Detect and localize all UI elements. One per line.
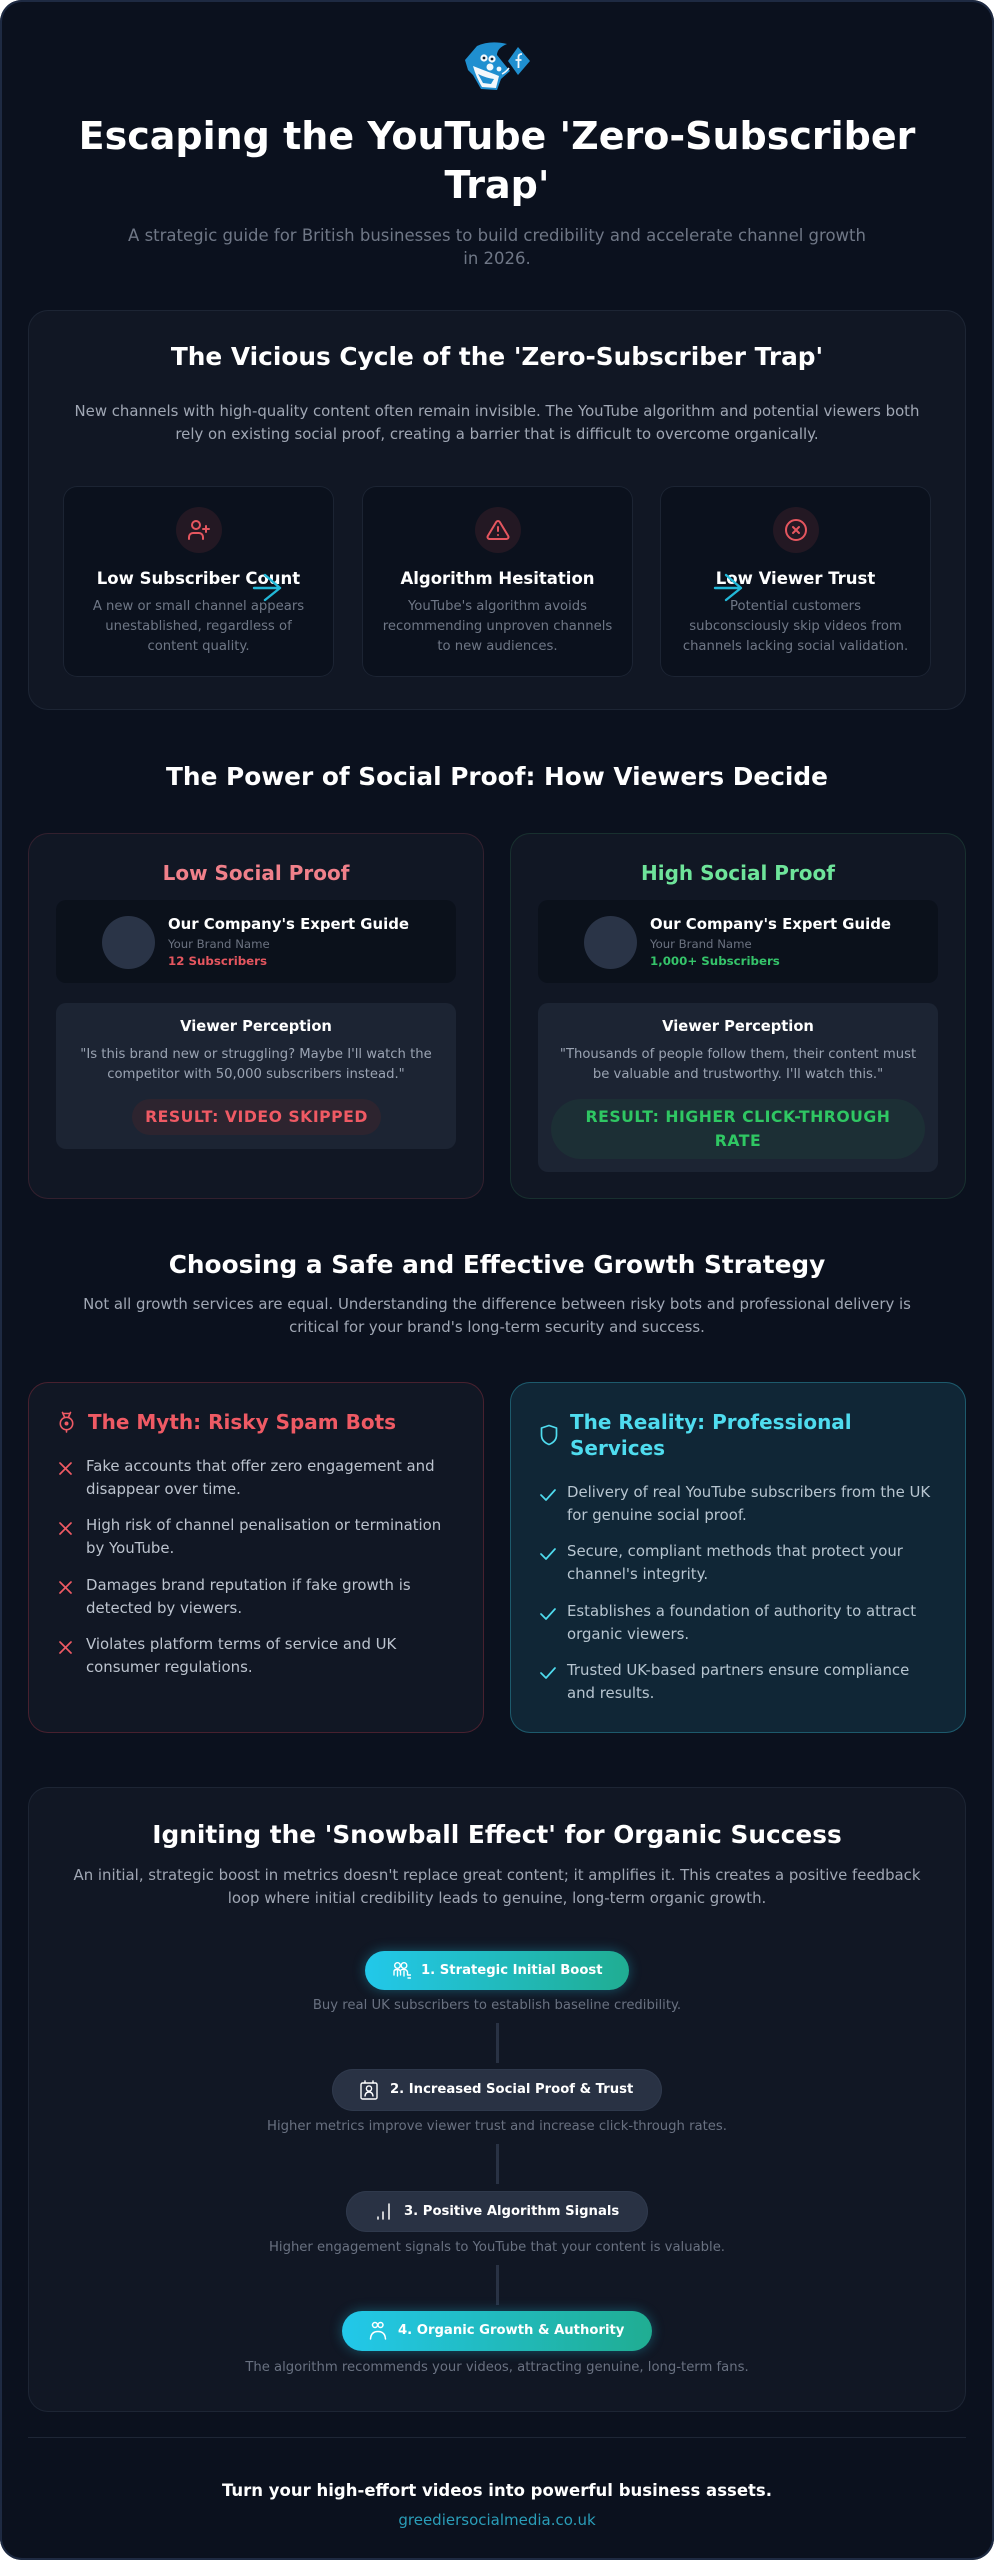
perception heading: Viewer Perception: [180, 1018, 332, 1035]
card: low viewer trust: [660, 486, 931, 677]
perception quote: [80, 1047, 432, 1082]
card title: Low Subscriber Count: [97, 569, 300, 588]
myth point 3: [86, 1576, 411, 1617]
title: Trap': [445, 163, 549, 207]
card text: [683, 599, 908, 654]
result badge: [132, 1099, 381, 1135]
intro text: growth strategy: Not all growth services are equal. Understanding the difference between risky bots and professional delivery is: [83, 1295, 911, 1313]
card: low subscriber count: [63, 486, 334, 677]
panel: vicious cycle: [28, 310, 966, 710]
myth point 4: consumer regulations.: [86, 1658, 253, 1676]
x icon: [59, 1522, 72, 1535]
subtitle: [128, 226, 866, 268]
viewer perception: high: [538, 1003, 938, 1172]
myth point 2: [86, 1516, 441, 1557]
step 4 label: 4. Organic Growth & Authority: [398, 2323, 624, 2338]
subtitle: in 2026.: [463, 249, 531, 268]
icon: user plus: [176, 507, 222, 553]
panel heading: low: Low Social Proof: [163, 861, 349, 885]
video title: Our Company's Expert Guide: [650, 915, 891, 933]
myth list: [59, 1456, 441, 1676]
x icon: [59, 1462, 72, 1475]
arrow: second to third card: [714, 574, 742, 602]
reality point 4: and results.: [567, 1684, 654, 1702]
subscriber count: 1,000+ Subscribers: [650, 954, 780, 968]
arrow: first to second card: [252, 574, 282, 602]
card title: Algorithm Hesitation: [400, 569, 595, 588]
check icon: [540, 1489, 556, 1501]
reality point 2: channel's integrity.: [567, 1565, 708, 1583]
check icon: [540, 1548, 556, 1560]
perception quote: "Thousands of people follow them, their content must: [560, 1047, 916, 1062]
perception quote: be valuable and trustworthy. I'll watch this.": [593, 1067, 883, 1082]
viewer perception: low: [56, 1003, 456, 1149]
step 1 label: 1. Strategic Initial Boost: [421, 1963, 603, 1978]
brand name: Your Brand Name: [650, 937, 752, 951]
step 1 description: Buy real UK subscribers to establish baseline credibility.: [313, 1998, 681, 2013]
myth point 3: Damages brand reputation if fake growth is: [86, 1576, 411, 1594]
card text: channels lacking social validation.: [683, 639, 908, 654]
myth point 2: by YouTube.: [86, 1539, 174, 1557]
myth heading: The Myth: Risky Spam Bots: [88, 1410, 396, 1434]
card text: [93, 599, 304, 654]
intro text: vicious cycle: [75, 402, 919, 443]
heading: snowball effect: Igniting the 'Snowball Effect' for Organic Success: [152, 1820, 842, 1849]
title: [79, 114, 916, 207]
video preview: low: [56, 900, 456, 983]
card text: subconsciously skip videos from: [689, 619, 902, 634]
subtitle: A strategic guide for British businesses to build credibility and accelerate channel growth: [128, 226, 866, 245]
card text: unestablished, regardless of: [105, 619, 292, 634]
intro text: vicious cycle: rely on existing social proof, creating a barrier that is difficult to overcome organically.: [175, 425, 819, 443]
heading: power of social proof: The Power of Social Proof: How Viewers Decide: [166, 762, 828, 791]
footer tagline: Turn your high-effort videos into powerful business assets.: [222, 2481, 772, 2500]
check icon: [540, 1667, 556, 1679]
step 3 description: Higher engagement signals to YouTube that your content is valuable.: [269, 2240, 725, 2255]
reality point 4: Trusted UK-based partners ensure compliance: [567, 1661, 909, 1679]
check icon: [540, 1608, 556, 1620]
step 2 label: 2. Increased Social Proof & Trust: [390, 2082, 633, 2097]
intro text: growth strategy: [83, 1295, 911, 1336]
myth point 1: [86, 1456, 435, 1498]
reality point 3: organic viewers.: [567, 1624, 689, 1642]
myth point 3: detected by viewers.: [86, 1599, 242, 1617]
card title: Low Viewer Trust: [716, 569, 875, 588]
myth point 1: Fake accounts that offer zero engagement and: [86, 1456, 435, 1474]
step 2 description: Higher metrics improve viewer trust and increase click-through rates.: [267, 2119, 727, 2134]
panel: the reality: [510, 1382, 966, 1733]
reality point 1: [567, 1482, 930, 1524]
card text: A new or small channel appears: [93, 599, 304, 614]
step 4 pill: [342, 2311, 652, 2351]
myth point 1: disappear over time.: [86, 1480, 241, 1498]
step 2 pill: [332, 2069, 662, 2111]
result badge: [551, 1099, 925, 1159]
icon: person with infinity: [370, 2322, 386, 2340]
myth point 4: Violates platform terms of service and UK: [86, 1635, 396, 1653]
icon: shield: [540, 1424, 558, 1446]
intro text: snowball effect: An initial, strategic boost in metrics doesn't replace great content; it amplifies it. This creates a positive feedback: [74, 1866, 920, 1884]
subscriber count: 12 Subscribers: [168, 954, 267, 968]
brand name: Your Brand Name: [168, 937, 270, 951]
channel avatar: [102, 916, 154, 968]
icon: warning triangle: [474, 507, 520, 553]
panel: the myth: [28, 1382, 484, 1733]
step 3 label: 3. Positive Algorithm Signals: [404, 2204, 619, 2219]
reality heading: [570, 1410, 852, 1460]
channel avatar: [584, 916, 636, 968]
perception quote: "Is this brand new or struggling? Maybe I'll watch the: [80, 1047, 432, 1062]
x icon: [59, 1641, 72, 1654]
card text: YouTube's algorithm avoids: [408, 599, 587, 614]
icon: contact card: [360, 2080, 378, 2100]
card text: to new audiences.: [437, 639, 558, 654]
card text: Potential customers: [730, 599, 861, 614]
panel: low social proof: [28, 833, 484, 1199]
myth point 2: High risk of channel penalisation or termination: [86, 1516, 441, 1534]
step 3 pill: [346, 2191, 648, 2232]
video preview: high: [538, 900, 938, 983]
reality heading: The Reality: Professional: [570, 1410, 852, 1434]
card: algorithm hesitation: [362, 486, 633, 677]
reality point 4: [566, 1661, 909, 1702]
logo: blue mascot with social badge: [465, 42, 530, 90]
perception quote: competitor with 50,000 subscribers instead.": [107, 1067, 405, 1082]
perception quote: [560, 1047, 916, 1082]
myth point 4: [86, 1635, 396, 1676]
result badge: RESULT: VIDEO SKIPPED: [145, 1107, 368, 1126]
x icon: [59, 1581, 72, 1594]
result badge: RESULT: HIGHER CLICK-THROUGH: [586, 1107, 890, 1126]
icon: circled x: [772, 507, 818, 553]
step 4 description: The algorithm recommends your videos, attracting genuine, long-term fans.: [245, 2360, 749, 2375]
card text: content quality.: [147, 639, 250, 654]
perception heading: Viewer Perception: [662, 1018, 814, 1035]
intro text: snowball effect: [74, 1866, 920, 1906]
result badge: RATE: [715, 1131, 761, 1150]
step 1 pill: [364, 1951, 629, 1990]
reality point 3: Establishes a foundation of authority to attract: [567, 1602, 916, 1620]
icon: bot: [60, 1412, 74, 1433]
panel: snowball effect: [28, 1787, 966, 2412]
card text: recommending unproven channels: [383, 619, 612, 634]
reality list: [540, 1482, 930, 1702]
panel heading: high: High Social Proof: [641, 861, 835, 885]
title: Escaping the YouTube 'Zero-Subscriber: [79, 114, 915, 158]
reality point 1: for genuine social proof.: [567, 1506, 747, 1524]
video title: Our Company's Expert Guide: [168, 915, 409, 933]
footer link: greediersocialmedia.co.uk: [398, 2511, 596, 2529]
intro text: vicious cycle: New channels with high-quality content often remain invisible. The YouTube algorithm and potential viewers both: [75, 402, 919, 420]
intro text: growth strategy: critical for your brand's long-term security and success.: [289, 1318, 705, 1336]
icon: signal bars: [377, 2203, 390, 2220]
reality point 2: [567, 1542, 903, 1583]
card text: [383, 599, 612, 654]
reality point 1: Delivery of real YouTube subscribers from the UK: [567, 1482, 930, 1500]
reality heading: Services: [570, 1436, 665, 1460]
icon: users: [393, 1962, 411, 1979]
heading: growth strategy: Choosing a Safe and Effective Growth Strategy: [169, 1250, 825, 1279]
reality point 2: Secure, compliant methods that protect your: [567, 1542, 903, 1560]
reality point 3: [567, 1602, 916, 1642]
intro text: snowball effect: loop where initial credibility leads to genuine, long-term organic growth.: [228, 1888, 766, 1906]
panel: high social proof: [510, 833, 966, 1199]
heading: vicious cycle: The Vicious Cycle of the 'Zero-Subscriber Trap': [171, 342, 823, 371]
